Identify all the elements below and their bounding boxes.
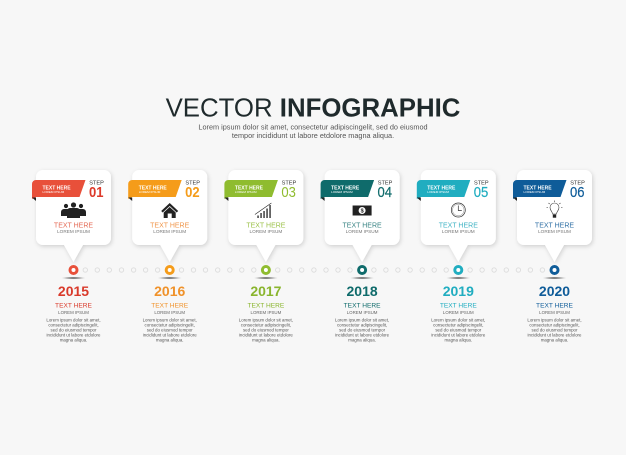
marker 6 (542, 265, 566, 279)
marker 3 (254, 265, 278, 279)
caption 6: Lorem ipsum dolor sit amet, (527, 318, 582, 322)
year 3: 2017 (250, 283, 282, 299)
step 3: 2017 (224, 170, 303, 342)
marker 2 (158, 265, 182, 279)
caption 2: incididunt ut labore etdolore (143, 332, 197, 338)
banner 3 (224, 180, 278, 201)
banner 1: TEXT HERE (42, 186, 71, 192)
card 6 (517, 170, 592, 262)
caption 5: incididunt ut labore etdolore (431, 332, 486, 338)
card 2 (132, 170, 207, 262)
step number 3: STEP (282, 180, 296, 186)
caption 3 (239, 302, 293, 342)
banner 5 (417, 180, 470, 201)
caption 1: TEXT HERE (55, 302, 93, 310)
caption 6: LOREM IPSUM (539, 310, 570, 315)
card 5 (421, 170, 496, 262)
caption 1: consectetur adipiscingelit, (48, 322, 99, 328)
icon: people (61, 202, 86, 218)
card heading 1: LOREM IPSUM (57, 229, 90, 234)
step 5: 2019 (417, 170, 496, 342)
caption 5: TEXT HERE (440, 302, 477, 310)
card heading 6: TEXT HERE (535, 222, 574, 230)
caption 1: LOREM IPSUM (58, 310, 89, 315)
card heading 2: TEXT HERE (150, 222, 190, 230)
banner 4: TEXT HERE (331, 186, 360, 192)
marker 1 (62, 265, 86, 279)
year 1: 2015 (58, 283, 89, 299)
caption 5: consectetur adipiscingelit, (433, 322, 483, 328)
caption 5: magna aliqua. (445, 338, 472, 342)
title: VECTOR INFOGRAPHIC (166, 94, 460, 122)
caption 5: Lorem ipsum dolor sit amet, (431, 318, 485, 322)
caption 5: sed do eiusmod tempor (435, 328, 482, 332)
caption 6: TEXT HERE (536, 302, 574, 310)
banner 2 (128, 180, 182, 201)
caption 6: sed do eiusmod tempor (532, 328, 578, 332)
icon: light bulb (546, 200, 562, 218)
caption 6: magna aliqua. (541, 338, 568, 342)
banner 6: LOREM IPSUM (524, 190, 546, 194)
caption 2: magna aliqua. (156, 338, 183, 342)
card heading 3: TEXT HERE (246, 222, 286, 230)
step number 6: 06 (570, 184, 584, 201)
caption 3: sed do eiusmod tempor (243, 328, 289, 332)
step 6: 2020 (513, 170, 592, 342)
caption 6 (527, 302, 582, 342)
caption 5: LOREM IPSUM (443, 310, 474, 315)
banner 5: LOREM IPSUM (427, 190, 449, 194)
icon: banknote: $ (361, 208, 364, 214)
caption 2 (143, 302, 197, 342)
card heading 4 (343, 222, 382, 234)
banner 2: LOREM IPSUM (139, 190, 161, 194)
subtitle: tempor incididunt ut labore etdolore magna aliqua. (232, 131, 394, 140)
caption 3: TEXT HERE (247, 302, 285, 310)
step 2: 2016 (128, 170, 207, 342)
caption 3: LOREM IPSUM (251, 310, 282, 315)
caption 1 (46, 302, 101, 342)
caption 4: TEXT HERE (344, 302, 381, 310)
caption 4: consectetur adipiscingelit, (337, 322, 387, 328)
step number 6: STEP (570, 180, 585, 186)
card 3 (228, 170, 303, 262)
icon: house (161, 203, 178, 218)
caption 3: magna aliqua. (252, 338, 280, 342)
caption 4 (335, 302, 390, 342)
step number 1: 01 (89, 184, 103, 201)
step number 5: 05 (474, 184, 488, 201)
step number 2: 02 (185, 184, 200, 201)
caption 6: incididunt ut labore etdolore (528, 332, 582, 338)
banner 6 (513, 180, 566, 201)
caption 5 (431, 302, 486, 342)
step 4: 2018 (321, 170, 400, 342)
card 1 (36, 170, 111, 262)
step number 1: STEP (89, 180, 104, 186)
card heading 6 (535, 222, 574, 234)
year 4: 2018 (347, 283, 378, 299)
banner 4: LOREM IPSUM (331, 190, 353, 194)
card heading 4: TEXT HERE (343, 222, 382, 230)
caption 4: incididunt ut labore etdolore (335, 332, 390, 338)
card heading 3 (246, 222, 286, 234)
icon: banknote (353, 206, 372, 216)
caption 4: Lorem ipsum dolor sit amet, (335, 318, 389, 322)
subtitle: Lorem ipsum dolor sit amet, consectetur adipiscingelit, sed do eiusmod (198, 122, 428, 132)
year 5: 2019 (443, 283, 474, 299)
step number 2: STEP (185, 180, 200, 186)
step number 5: STEP (474, 180, 489, 186)
card heading 5 (439, 222, 478, 234)
marker 5 (446, 265, 470, 279)
timeline dots (83, 268, 545, 272)
marker 4 (350, 265, 374, 279)
banner 3: LOREM IPSUM (235, 190, 257, 194)
year 6: 2020 (539, 283, 570, 299)
card heading 2: LOREM IPSUM (153, 229, 186, 234)
caption 2: Lorem ipsum dolor sit amet, (143, 318, 197, 322)
caption 1: Lorem ipsum dolor sit amet, (46, 318, 101, 322)
card heading 5: TEXT HERE (439, 222, 478, 230)
caption 3: Lorem ipsum dolor sit amet, (239, 318, 293, 322)
banner 4 (321, 180, 374, 201)
icon: clock (451, 203, 465, 217)
caption 2: sed do eiusmod tempor (147, 328, 193, 332)
caption 2: consectetur adipiscingelit, (145, 322, 195, 328)
step 1: 2015 (32, 170, 111, 342)
banner 1: LOREM IPSUM (42, 190, 65, 194)
caption 3: incididunt ut labore etdolore (239, 332, 293, 338)
caption 4: magna aliqua. (348, 338, 376, 342)
caption 4: sed do eiusmod tempor (339, 328, 386, 332)
card 4 (325, 170, 400, 262)
caption 1: magna aliqua. (60, 338, 87, 342)
caption 1: sed do eiusmod tempor (51, 328, 97, 332)
step number 4: STEP (378, 180, 393, 186)
banner 1 (32, 180, 86, 201)
year 2: 2016 (154, 283, 185, 299)
banner 5: TEXT HERE (427, 186, 456, 192)
banner 2: TEXT HERE (139, 186, 167, 192)
icon: growth chart (255, 203, 271, 218)
banner 6: TEXT HERE (524, 186, 552, 192)
card heading 6: LOREM IPSUM (538, 229, 571, 234)
step number 3: 03 (281, 184, 296, 201)
card heading 1: TEXT HERE (54, 222, 93, 230)
caption 6: consectetur adipiscingelit, (529, 322, 580, 328)
step number 4: 04 (378, 184, 392, 201)
subtitle (198, 122, 428, 140)
card heading 1 (54, 222, 93, 234)
caption 4: LOREM IPSUM (347, 310, 378, 315)
card heading 4: LOREM IPSUM (346, 229, 379, 234)
card heading 5: LOREM IPSUM (442, 229, 475, 234)
card heading 2 (150, 222, 190, 234)
caption 2: LOREM IPSUM (154, 310, 185, 315)
caption 2: TEXT HERE (151, 302, 189, 310)
card heading 3: LOREM IPSUM (249, 229, 282, 234)
caption 3: consectetur adipiscingelit, (241, 322, 291, 328)
banner 3: TEXT HERE (235, 186, 264, 192)
caption 1: incididunt ut labore etdolore (47, 332, 101, 338)
